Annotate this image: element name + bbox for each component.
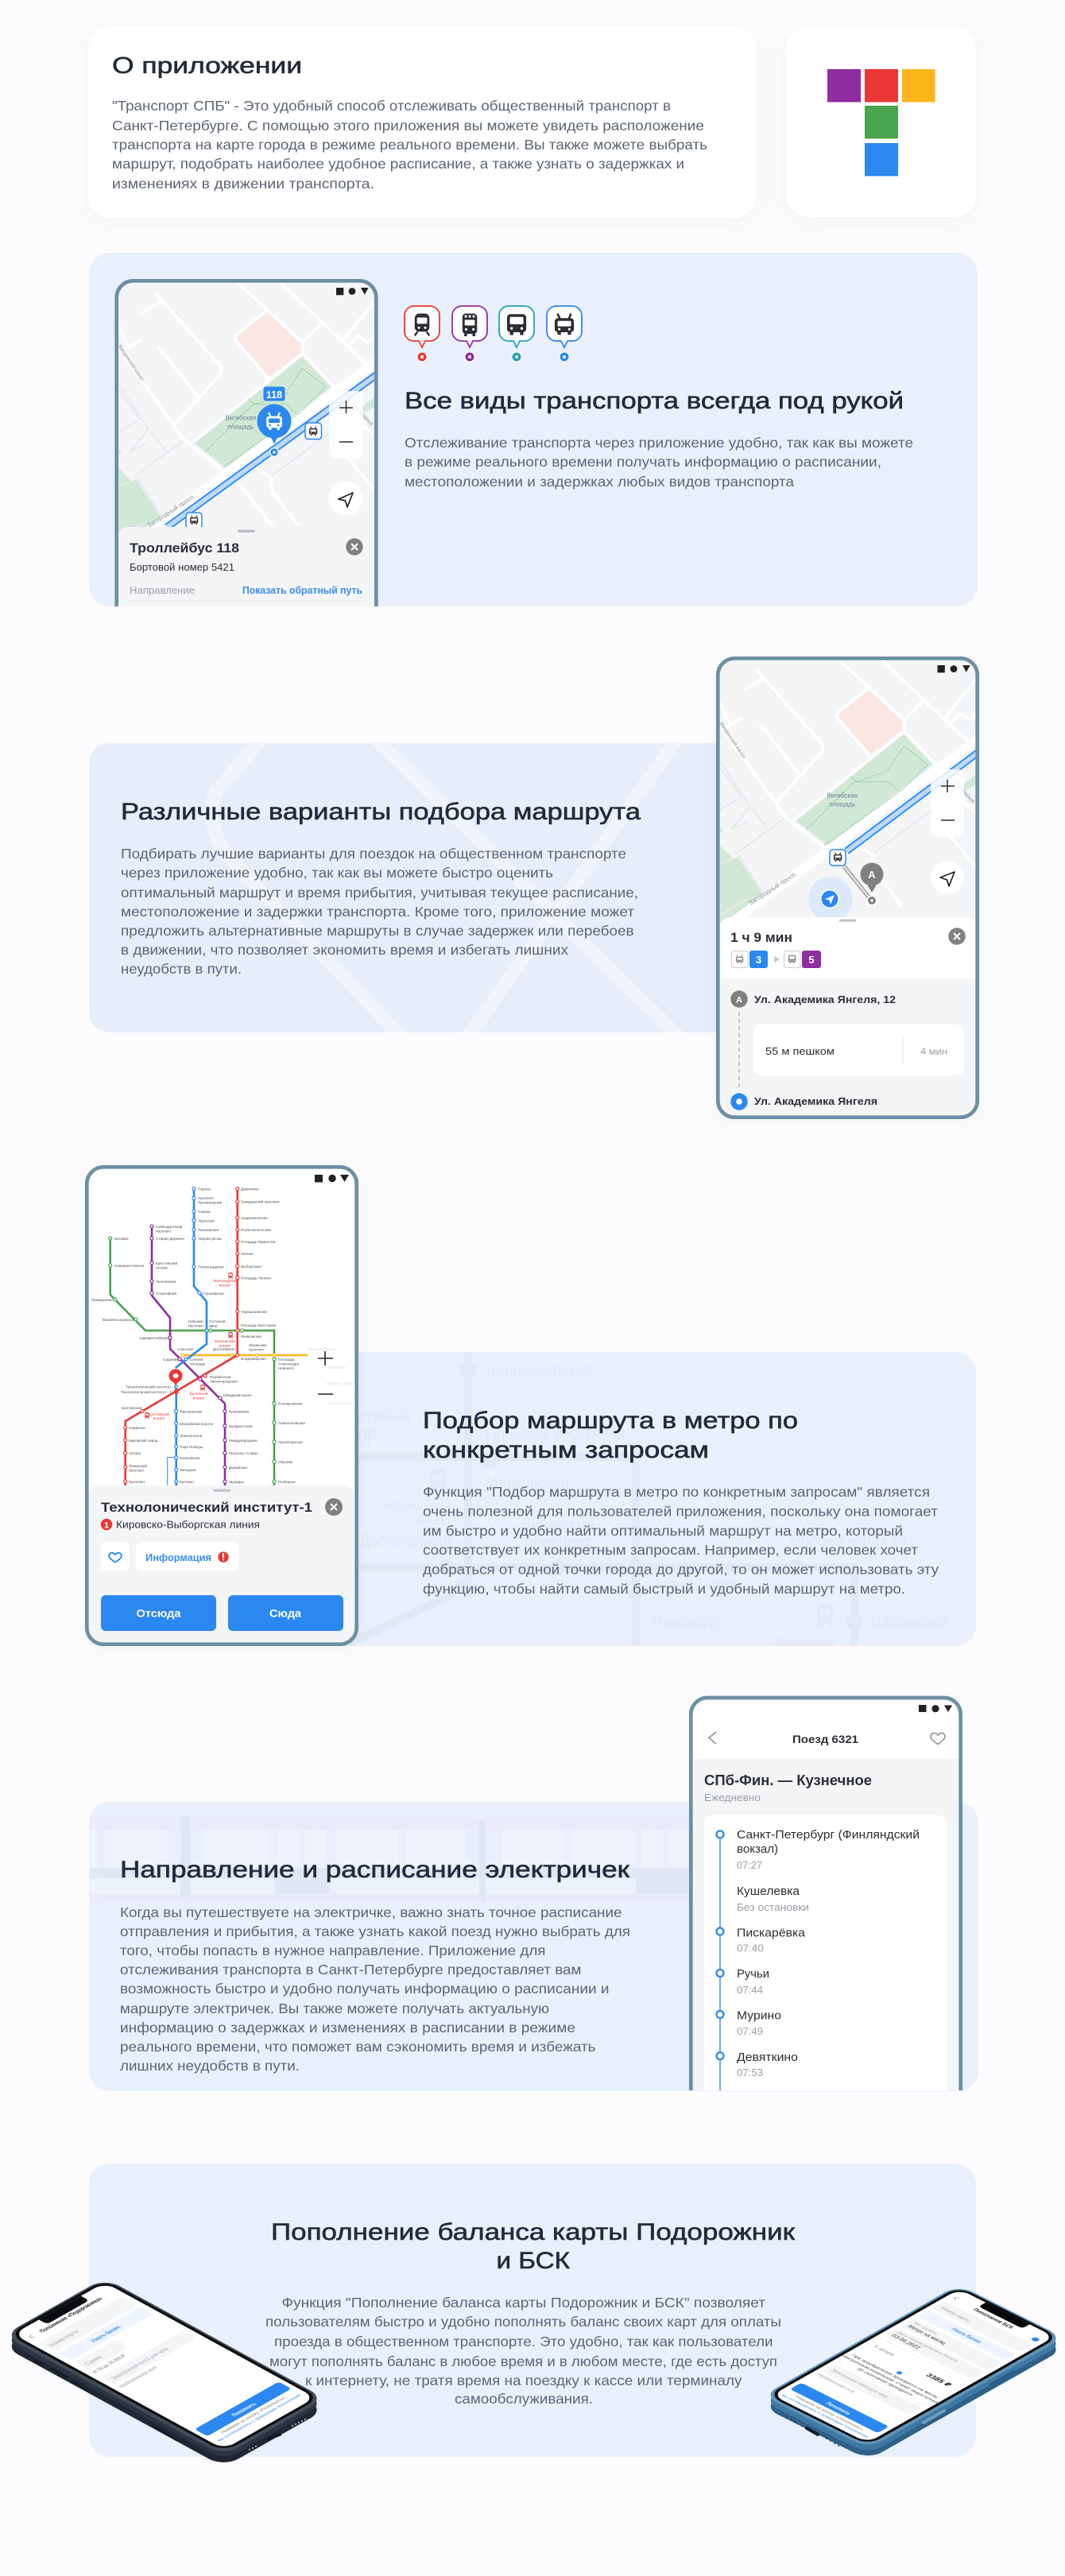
- background metro scheme: стиный: [358, 1408, 410, 1426]
- station labels: Удельная: [198, 1219, 215, 1222]
- heading: metro route search: [423, 1408, 798, 1463]
- station labels: Бухарестская: [229, 1424, 253, 1428]
- screen content: Необязательное поле: [117, 2365, 159, 2389]
- text block: route options: [121, 846, 638, 977]
- stops list: вокзал): [737, 1843, 778, 1856]
- screen content: Дата начала действия билета: [896, 2330, 960, 2363]
- station labels: Парк Победы: [180, 1445, 203, 1449]
- zoom control: Улица Дыбенко: [327, 1401, 354, 1405]
- station labels: Просвещения: [198, 1200, 223, 1205]
- text block: card top-up: к интернету, не тратя время на поездку к кассе или терминалу: [305, 2373, 742, 2388]
- text block: about: транспорта на карте города в режиме реального времени. Вы также можете выбрать: [112, 137, 707, 153]
- station labels: Петроградская: [198, 1265, 224, 1269]
- station labels: Пролетарская: [278, 1440, 303, 1444]
- status bar icons: [315, 1175, 349, 1183]
- panel: all transport types: [89, 253, 978, 606]
- info sheet: Показать обратный путь: [242, 584, 362, 596]
- map: [715, 656, 985, 924]
- station labels: Василеостровская: [103, 1318, 135, 1322]
- station labels: Достоевская: [213, 1347, 235, 1351]
- text block: metro route search: функцию, чтобы найти самый быстрый и удобный маршрут на метро.: [423, 1581, 905, 1597]
- route title: СПб-Фин. — Кузнечное: [704, 1772, 872, 1788]
- heading: metro route search: конкретным запросам: [423, 1437, 709, 1463]
- text block: about: Санкт-Петербурге. С помощью этого приложения вы можете увидеть расположение: [112, 118, 704, 134]
- screen content: вы соглашаетесь с правилами пополнения: [780, 2394, 869, 2438]
- stops list: Пискарёвка: [737, 1927, 806, 1939]
- text block: commuter trains: того, чтобы попасть в нужное направление. Приложение для: [120, 1943, 545, 1958]
- map: Загородный просп.: [748, 870, 798, 907]
- text block: commuter trains: информацию о задержках и изменениях в расписании в режиме: [120, 2020, 575, 2036]
- icon: commercial bus marker: [452, 306, 487, 362]
- phone: left isometric (Podorozhnik): [3, 2278, 325, 2467]
- phone: map with trolleybus: [114, 279, 378, 606]
- railway stations: вокзал: [219, 1343, 231, 1348]
- station labels: Комендантский: [156, 1224, 183, 1229]
- screen content: Номер карты: [47, 2329, 81, 2348]
- text block: all transport: местоположении и задержках любых видов транспорта: [405, 474, 794, 490]
- location pin: [168, 1369, 183, 1393]
- button: from here: [101, 1595, 216, 1631]
- stops list: Ручьи: [737, 1968, 769, 1981]
- station labels: Звёздная: [180, 1468, 196, 1472]
- station labels: Беговая: [114, 1237, 129, 1241]
- zoom control: [931, 769, 964, 837]
- station labels: Горьковская: [203, 1292, 224, 1296]
- point A marker: [860, 863, 884, 906]
- metro lines: [110, 1189, 323, 1486]
- station labels: Александра: [278, 1362, 299, 1365]
- station labels: Адмиралтейская: [139, 1335, 168, 1340]
- text block: card top-up: пользователям быстро и удобно пополнять баланс своих карт для оплаты: [265, 2314, 781, 2330]
- screen content: Узнать баланс: [950, 2326, 984, 2344]
- text block: commuter trains: маршруте электричек. Вы также можете получать актуальную: [120, 2001, 549, 2016]
- station labels: Ленинский: [129, 1463, 147, 1468]
- header bar: [693, 1699, 958, 1759]
- station labels: Елизаровская: [278, 1402, 303, 1405]
- button: from here: Отсюда: [137, 1607, 181, 1620]
- screen content: до окончания проездного: [856, 2368, 914, 2397]
- station labels: Чернышевская: [241, 1310, 267, 1314]
- point A marker: А: [868, 869, 876, 881]
- screen content: вы соглашаетесь с правилами пополнения: [217, 2394, 303, 2442]
- panel: logo: [786, 27, 976, 217]
- station labels: Рыбацкое: [278, 1480, 296, 1484]
- background metro scheme: вокзал: [415, 1513, 451, 1527]
- route chips: 3: [756, 954, 761, 966]
- status bar icons: [336, 288, 369, 295]
- metro stations: [109, 1187, 324, 1483]
- railway stations: Финляндский: [213, 1278, 237, 1283]
- station labels: проспект: [129, 1469, 145, 1472]
- map: Загородный просп.: [146, 493, 196, 529]
- heading: commuter trains: Направление и расписание электричек: [120, 1857, 630, 1883]
- stops list: Санкт-Петербург (Финляндский: [737, 1829, 920, 1842]
- heading: card top-up: [271, 2219, 796, 2274]
- text block: route options: через приложение удобно, так как вы можете быстро оценить: [121, 865, 553, 881]
- railway stations: Балтийский: [149, 1412, 169, 1416]
- screen content: Пополнить: [824, 2401, 853, 2415]
- info sheet: [118, 527, 374, 606]
- railway stations: Московский: [215, 1338, 235, 1343]
- button: to here: [228, 1595, 343, 1631]
- station sheet: Кировско-Выборгская линия: [116, 1518, 260, 1531]
- info sheet: Бортовой номер 5421: [130, 561, 234, 573]
- screen content: Метро на месяц: [906, 2324, 949, 2346]
- text block: route options: предложить альтернативные маршруты в случае задержек или перебоев: [121, 923, 634, 939]
- station sheet: [89, 1486, 354, 1652]
- screen content: Электронная почта для чека: [829, 2368, 890, 2399]
- text block: card top-up: [265, 2295, 781, 2407]
- text block: metro route search: добраться от одной точки города до другой, то он может использовать эту: [423, 1561, 939, 1577]
- stops list: 07:40: [737, 1943, 764, 1954]
- text block: card top-up: Функция "Пополнение баланса карты Подорожник и БСК" позволяет: [281, 2295, 765, 2311]
- station labels: проспект: [188, 1324, 204, 1327]
- station labels: Владимирская: [241, 1357, 266, 1361]
- station labels: Приморская: [91, 1298, 113, 1302]
- text block: metro route search: им быстро и удобно найти оптимальный маршрут на метро, который: [423, 1523, 903, 1539]
- text block: metro route search: [423, 1484, 939, 1597]
- pin: trolleybus 118: 118: [266, 389, 282, 401]
- background metro scheme: проспект: [525, 1533, 591, 1551]
- locate button: [329, 482, 362, 515]
- map: Подъездной: [953, 778, 976, 804]
- heading: card top-up: и БСК: [496, 2248, 571, 2274]
- phone side details: [35, 2361, 280, 2440]
- current location: [808, 877, 853, 921]
- text block: commuter trains: [120, 1904, 630, 2074]
- text block: all transport: Отслеживание транспорта через приложение удобно, так как вы можете: [405, 435, 913, 451]
- station labels: Спортивная: [156, 1292, 176, 1296]
- station labels: Площадь Восстания: [241, 1323, 277, 1327]
- station labels: Международная: [229, 1439, 258, 1443]
- background metro scheme: Ладожский: [775, 1636, 837, 1649]
- screen content: 03.06.2022: [890, 2334, 923, 2349]
- text block: all transport: в режиме реального времени получать информацию о расписании,: [405, 454, 881, 470]
- station labels: площадь: [190, 1362, 206, 1365]
- station labels: Чкаловская: [156, 1280, 176, 1284]
- station labels: Балтийская: [122, 1405, 142, 1410]
- background metro scheme: ор: [358, 1425, 376, 1443]
- background metro scheme: Новочеркасская: [790, 1532, 906, 1550]
- panel: card top-up: [89, 2163, 976, 2457]
- screen content: Пополнение БСК: [971, 2307, 1016, 2330]
- text block: commuter trains: отправления и прибытия, а также узнать какой поезд нужно выбрать для: [120, 1923, 630, 1939]
- info sheet: Троллейбус 118: [130, 540, 239, 556]
- text block: about: "Транспорт СПБ" - Это удобный способ отслеживать общественный транспорт в: [112, 98, 671, 114]
- route title: Ежедневно: [704, 1792, 761, 1803]
- text block: commuter trains: отслеживания транспорта в Санкт-Петербурге предоставляет вам: [120, 1962, 582, 1978]
- map: площадь: [227, 423, 254, 430]
- stops list: 07:44: [737, 1984, 763, 1996]
- station labels: Технологический институт - 2: [126, 1385, 176, 1389]
- stops list: Мурино: [737, 2010, 781, 2023]
- station labels: Кировский завод: [129, 1438, 158, 1443]
- stop marker: [830, 850, 846, 866]
- screen content: Тип оплаты: [912, 2322, 939, 2335]
- phone: right isometric (BSK): [762, 2285, 1064, 2460]
- background metro scheme: Ладожская: [870, 1613, 951, 1631]
- railway stations: вокзал: [219, 1283, 231, 1288]
- stops list: [704, 1815, 947, 2117]
- station labels: Технологический институт - 1: [121, 1389, 172, 1394]
- button: to here: Сюда: [269, 1607, 301, 1620]
- map: Введенский канал: [718, 721, 747, 760]
- stops list: Девяткино: [737, 2051, 798, 2064]
- info button: [136, 1542, 238, 1571]
- stops list: 07:49: [737, 2025, 763, 2037]
- text block: commuter trains: лишних неудобств в пути.: [120, 2058, 300, 2074]
- locate button: [931, 861, 964, 894]
- route steps: [730, 990, 964, 1110]
- station sheet: 1: [104, 1521, 109, 1531]
- station labels: Автово: [129, 1451, 141, 1455]
- phone: route result: [715, 656, 985, 1122]
- zoom control: [329, 391, 363, 459]
- railway stations: вокзал: [193, 1396, 205, 1400]
- text block: all transport: [405, 435, 913, 490]
- screen content: Пополнение «Подорожника»: [37, 2296, 105, 2334]
- screen content: Пополнить: [230, 2402, 258, 2417]
- map: Рузовская: [810, 901, 826, 924]
- background metro scheme: Александра: [652, 1576, 737, 1594]
- map: Витебская: [827, 792, 858, 800]
- station labels: Спасская: [177, 1347, 194, 1351]
- station labels: Электросила: [180, 1434, 203, 1438]
- railway stations: вокзал: [153, 1416, 165, 1420]
- favourite button: [101, 1542, 130, 1571]
- route sheet: 1 ч 9 мин: [730, 930, 792, 945]
- station labels: [91, 1187, 305, 1484]
- text block: metro route search: соответствует их конкретным запросам. Например, если человек хочет: [423, 1542, 918, 1558]
- text block: route options: местоположение и задержки транспорта. Кроме того, приложение может: [121, 904, 634, 920]
- heading: metro route search: Подбор маршрута в метро по: [423, 1408, 798, 1434]
- heading: route options: Различные варианты подбора маршрута: [121, 799, 641, 825]
- background train: [180, 1817, 486, 1902]
- text block: about: маршрут, подобрать наиболее удобное расписание, а также узнать о задержках и: [112, 156, 684, 172]
- station labels: Лиговский: [249, 1342, 266, 1347]
- panel: commuter trains: [89, 1802, 978, 2091]
- station labels: Гражданский проспект: [241, 1199, 281, 1203]
- stops list: 07:53: [737, 2067, 763, 2078]
- station labels: Садовая: [163, 1358, 178, 1362]
- stops list: Без остановки: [737, 1901, 809, 1913]
- station labels: Невский: [188, 1319, 203, 1323]
- railway stations: [145, 1273, 237, 1420]
- text block: commuter trains: возможность быстро и удобно получать информацию о расписании и: [120, 1981, 609, 1997]
- background metro scheme: Невского: [652, 1613, 717, 1632]
- route steps: А: [736, 995, 742, 1005]
- zoom control: [308, 1348, 354, 1405]
- station labels: Невского: [278, 1366, 294, 1370]
- station labels: Выборгская: [241, 1265, 261, 1269]
- station labels: Проспект: [129, 1480, 145, 1484]
- screen content: Нажимая на кнопку «Пополнить»,: [794, 2396, 866, 2431]
- station labels: Крестовский: [156, 1261, 177, 1265]
- status bar icons: [938, 665, 970, 672]
- station labels: Новокрестовская: [114, 1264, 145, 1268]
- heading: about: О приложении: [112, 53, 302, 79]
- station labels: Площадь Ленина: [241, 1276, 271, 1280]
- route steps: 4 мин: [920, 1046, 947, 1057]
- stop markers: [186, 423, 321, 529]
- route chips: [731, 951, 821, 968]
- background metro scheme: Маяковская: [486, 1474, 569, 1493]
- screen content: Номер карты: [939, 2306, 973, 2323]
- screen content: Сумма: [83, 2354, 104, 2366]
- zoom control: Проспект Большевиков: [327, 1381, 368, 1385]
- screen content: При приобретении проездного на месяц: [850, 2354, 939, 2400]
- route steps: 55 м пешком: [765, 1045, 835, 1057]
- station labels: Фрунзенская: [180, 1410, 202, 1413]
- station labels: Звенигородская: [210, 1380, 238, 1383]
- panel: about the app: [88, 26, 757, 218]
- icon: trolleybus marker: [547, 306, 582, 362]
- header bar: Поезд 6321: [792, 1733, 858, 1745]
- zoom control: Ладожская: [327, 1365, 346, 1369]
- text block: commuter trains: реального времени, что поможет вам сэкономить время и избежать: [120, 2039, 596, 2055]
- stops list: 07:27: [737, 1859, 762, 1871]
- background metro scheme: Лиговский: [521, 1516, 594, 1534]
- station labels: Проспект Славы: [229, 1451, 258, 1455]
- station labels: Маяковская: [241, 1334, 261, 1338]
- route steps: Ул. Академика Янгеля, 12: [754, 994, 896, 1005]
- screen content: электронным кошельком, станет недоступным: [838, 2353, 941, 2405]
- background metro scheme: Достоевская: [359, 1532, 451, 1550]
- station labels: Купчино: [180, 1480, 194, 1484]
- metro scheme: [91, 1187, 324, 1486]
- station labels: Площадь Мужества: [241, 1240, 276, 1244]
- zoom control: Новочеркасская: [308, 1347, 337, 1351]
- station labels: Пушкинская: [210, 1375, 231, 1379]
- station labels: проспект: [249, 1348, 265, 1351]
- text block: about: изменениях в движении транспорта.: [112, 176, 374, 192]
- map: [118, 283, 374, 534]
- station labels: Лесная: [241, 1252, 254, 1256]
- station labels: Ломоносовская: [278, 1421, 305, 1425]
- screen content: [770, 2288, 1056, 2444]
- station labels: Дунайская: [229, 1465, 248, 1470]
- station labels: Гостиный: [209, 1319, 226, 1323]
- station labels: Академическая: [241, 1216, 268, 1220]
- station labels: Парнас: [198, 1187, 211, 1191]
- station labels: Пионерская: [198, 1228, 219, 1232]
- text block: about: [112, 98, 707, 192]
- icon: bus marker: [499, 306, 534, 362]
- info button: Информация: [145, 1551, 211, 1563]
- text block: commuter trains: Когда вы путешествуете на электричке, важно знать точное расписание: [120, 1904, 622, 1920]
- walking segment: [844, 866, 870, 899]
- heading: all transport: Все виды транспорта всегда под рукой: [405, 388, 904, 414]
- screen content: Нажимая на кнопку «Пополнить»,: [220, 2396, 289, 2435]
- station labels: Московская: [180, 1456, 200, 1460]
- text block: route options: в движении, что позволяет экономить время и избегать лишних: [121, 942, 568, 958]
- station labels: Волковская: [229, 1410, 250, 1413]
- station labels: Обухово: [278, 1460, 293, 1464]
- text block: card top-up: могут пополнять баланс в любое время и в любом месте, где есть доступ: [269, 2353, 777, 2369]
- station labels: Политехническая: [241, 1228, 272, 1232]
- text block: route options: неудобств в пути.: [121, 961, 242, 977]
- heading: card top-up: Пополнение баланса карты Подорожник: [271, 2219, 796, 2245]
- background metro scheme: Московский: [385, 1499, 451, 1513]
- phone: metro map: [87, 1167, 368, 1652]
- station labels: двор: [209, 1324, 218, 1327]
- icon: app logo: [827, 69, 935, 176]
- route sheet: [720, 917, 975, 979]
- station labels: Московские ворота: [180, 1422, 213, 1426]
- station labels: проспект: [156, 1229, 172, 1234]
- station labels: Нарвская: [129, 1426, 145, 1430]
- screen content: К оплате: [872, 2344, 897, 2357]
- screen content: Электронная почта для чека: [109, 2346, 171, 2380]
- station labels: остров: [156, 1265, 168, 1270]
- panel: route options: [89, 743, 716, 1032]
- route chips: 5: [808, 954, 815, 966]
- station labels: Старая Деревня: [156, 1237, 184, 1241]
- text block: metro route search: Функция "Подбор маршрута в метро по конкретным запросам" является: [423, 1484, 930, 1500]
- panel: metro route search: [318, 1352, 976, 1649]
- phone side details: [807, 2371, 1014, 2435]
- screen content: Необязательное поле: [815, 2373, 857, 2394]
- station labels: Площадь: [278, 1358, 295, 1362]
- screen content: Узнать баланс: [89, 2324, 123, 2343]
- text block: metro route search: очень полезной для пользователей приложения, поскольку она помогает: [423, 1504, 938, 1520]
- screen content: [14, 2283, 316, 2450]
- text block: card top-up: самообслуживания.: [455, 2391, 593, 2407]
- screen content: 3385 ₽: [924, 2373, 954, 2388]
- station labels: Проспект: [198, 1196, 215, 1200]
- station labels: Обводный канал: [223, 1393, 252, 1397]
- map: Введенский канал: [117, 343, 145, 382]
- background metro scheme: Площадь восстания: [486, 1425, 625, 1443]
- text block: route options: Подбирать лучшие варианты для поездок на общественном транспорте: [121, 846, 626, 862]
- background metro scheme: Чернышевская: [486, 1362, 592, 1380]
- text block: route options: оптимальный маршрут и время прибытия, учитывая текущее расписание,: [121, 885, 638, 901]
- station labels: Чёрная речка: [198, 1237, 222, 1241]
- map: Подъездной: [351, 401, 374, 427]
- route title: [704, 1772, 872, 1803]
- station labels: Девяткино: [241, 1187, 259, 1191]
- icon: metro marker: [405, 306, 440, 362]
- background metro scheme: [350, 1352, 951, 1649]
- map: площадь: [829, 800, 855, 808]
- text block: card top-up: проезда в общественном транспорте. Это удобно, так как пользователи: [274, 2334, 773, 2349]
- map: Витебская: [225, 415, 256, 422]
- icons: transport type markers: [405, 306, 582, 362]
- stops list: Кушелевка: [737, 1885, 800, 1898]
- station sheet: Технолонический институт-1: [101, 1500, 312, 1515]
- info sheet: Направление: [130, 584, 195, 596]
- pin: trolleybus 118: [258, 386, 291, 457]
- railway stations: Витебский: [190, 1391, 208, 1396]
- station labels: Шушары: [229, 1480, 245, 1484]
- station labels: Сенная: [190, 1358, 203, 1362]
- phone: train schedule: [691, 1698, 961, 2143]
- route steps: Ул. Академика Янгеля: [754, 1095, 877, 1107]
- screen content: от 50 до 15 000 ₽: [90, 2353, 127, 2374]
- station labels: Озерки: [198, 1210, 211, 1214]
